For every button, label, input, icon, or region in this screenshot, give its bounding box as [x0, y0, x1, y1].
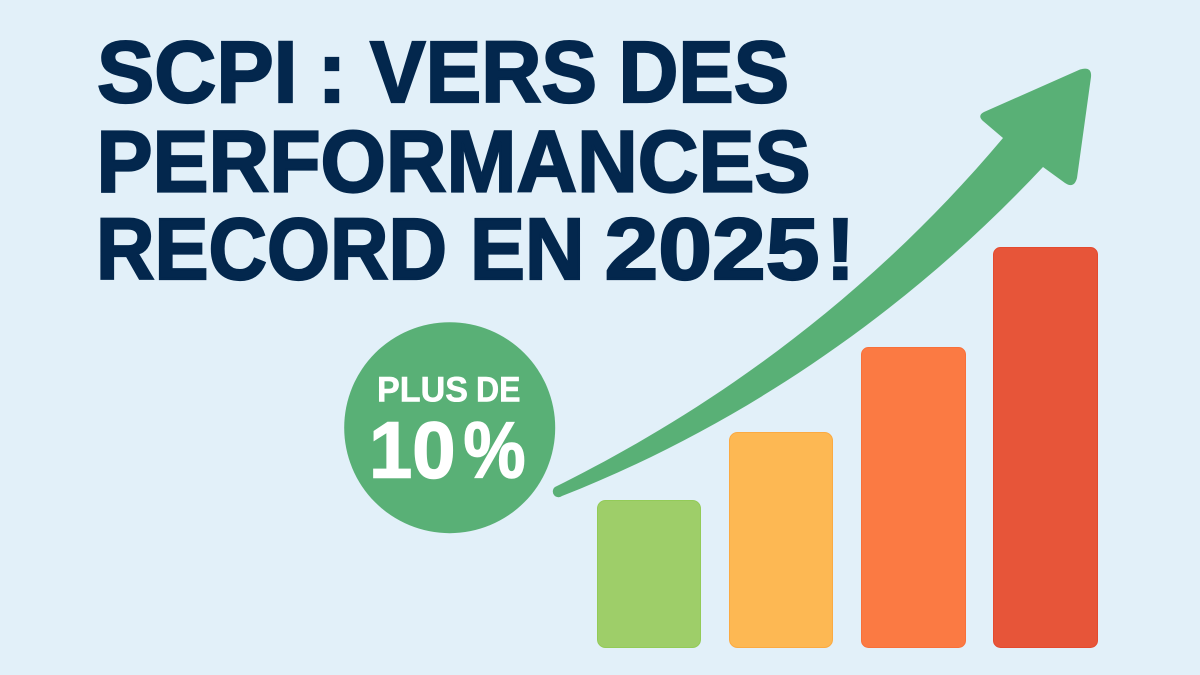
bar chart — [598, 248, 1098, 648]
title: : — [318, 24, 346, 121]
title: 2025 — [604, 201, 820, 298]
badge label — [377, 370, 520, 410]
title: SCPI — [97, 24, 298, 121]
badge value: 10 — [369, 406, 456, 494]
title: ! — [826, 201, 855, 298]
title: VERS — [370, 24, 597, 121]
title: RECORD — [96, 201, 447, 298]
title: EN — [470, 201, 584, 298]
title — [96, 24, 855, 298]
bar 2: yellow — [730, 432, 832, 648]
title: PERFORMANCES — [96, 114, 810, 210]
badge label: DE — [476, 370, 520, 410]
title: DES — [618, 24, 789, 121]
badge value — [369, 406, 526, 494]
bar 1: green — [598, 500, 700, 648]
bar 4: red — [994, 248, 1098, 648]
bar 3: orange — [862, 348, 966, 648]
badge label: PLUS — [377, 370, 468, 410]
badge value: % — [464, 406, 526, 494]
badge: plus de 10 % — [344, 322, 555, 533]
growth arrow — [553, 69, 1091, 497]
